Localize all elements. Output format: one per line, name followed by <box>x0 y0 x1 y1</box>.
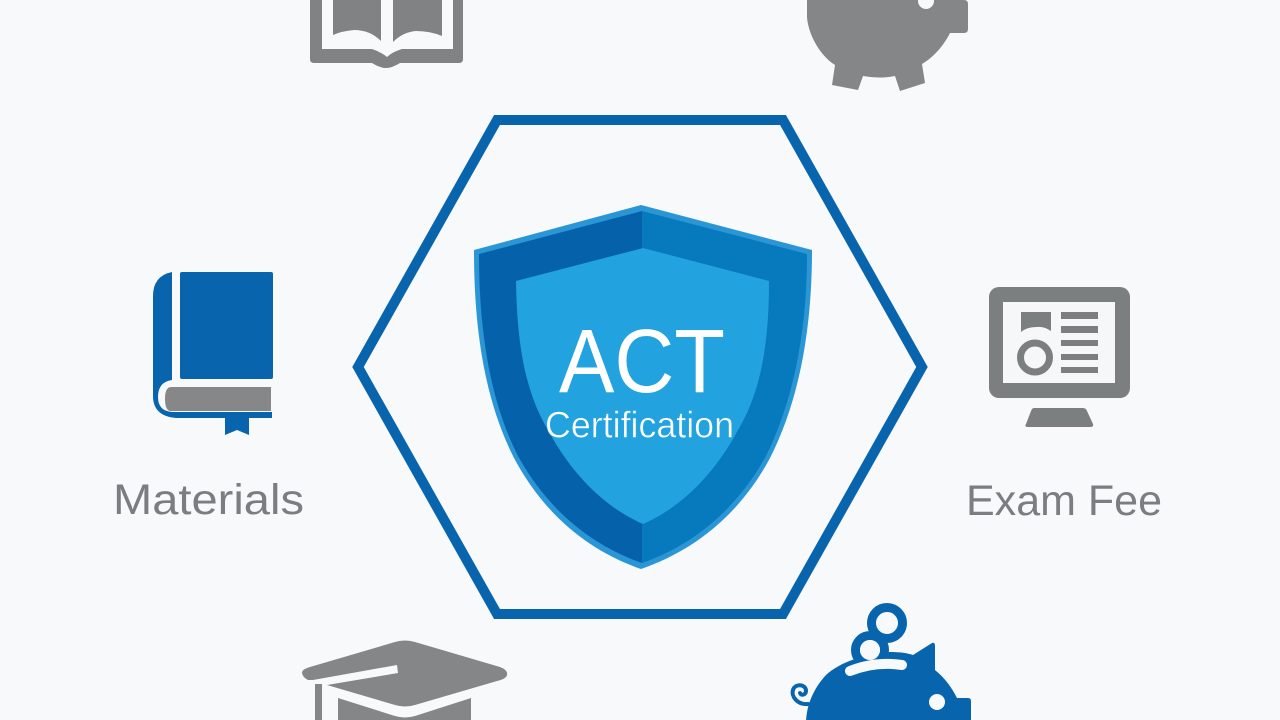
icon: book, blue (left) <box>153 272 273 435</box>
icon: piggy bank with coins, blue (bottom right) <box>793 608 971 720</box>
shield title: ACT: ACT <box>559 312 725 412</box>
icon: piggy bank, grey (top right) <box>807 0 968 91</box>
icon: graduation cap (bottom left) <box>302 640 507 720</box>
shield badge <box>474 205 812 569</box>
icon: open book (top left) <box>310 0 463 68</box>
shield subtitle: Certification: Certification <box>545 404 734 446</box>
hexagon frame <box>358 120 922 614</box>
label: Materials: Materials <box>113 476 304 524</box>
label: Exam Fee: Exam Fee <box>966 477 1162 525</box>
icon: exam monitor (right) <box>989 287 1130 427</box>
